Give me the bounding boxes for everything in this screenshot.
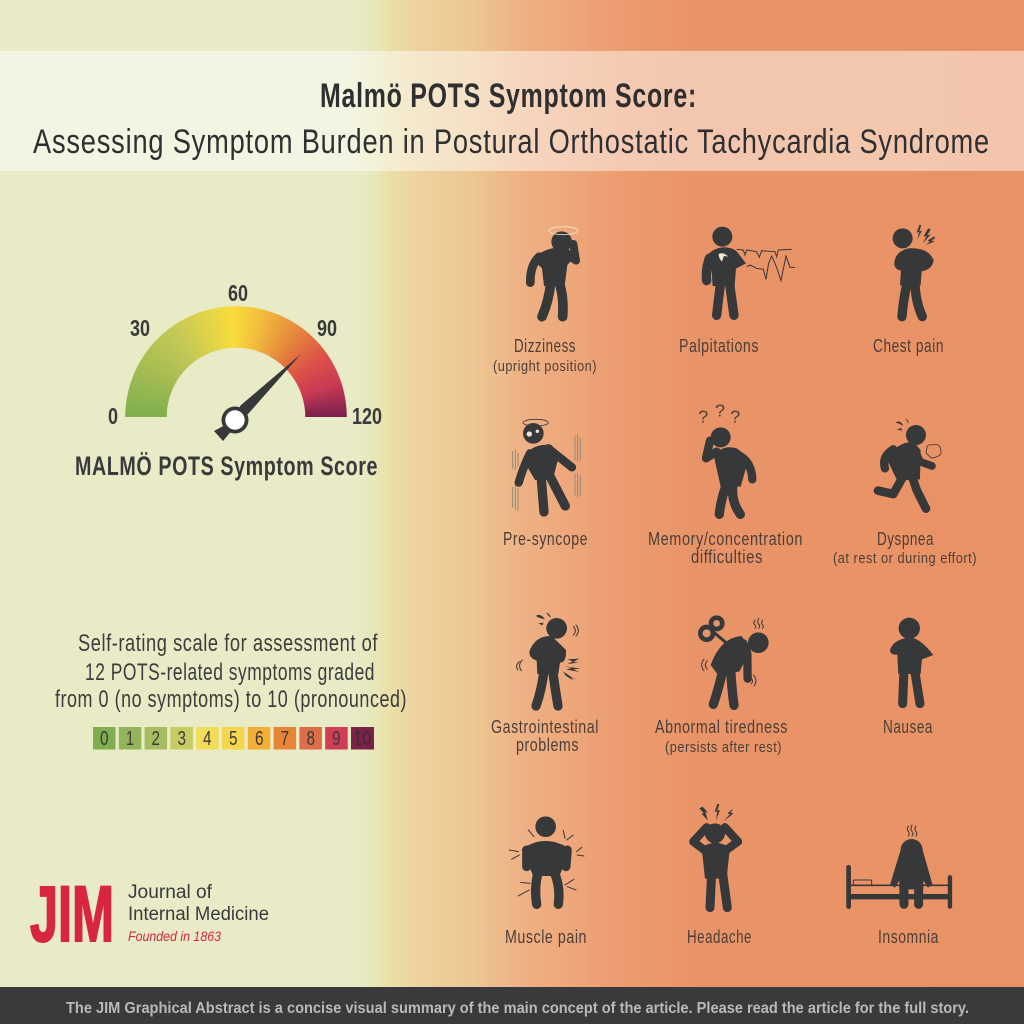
rating scale 0 to 10: 0	[100, 728, 108, 750]
label: dizziness: Dizziness	[514, 336, 576, 356]
gauge title: MALMÖ POTS Symptom Score	[75, 451, 378, 481]
gauge scale numbers: 90	[317, 315, 337, 341]
scale description: from 0 (no symptoms) to 10 (pronounced)	[55, 686, 407, 713]
label: dyspnea: (at rest or during effort)	[833, 550, 977, 567]
label: dizziness: (upright position)	[493, 358, 597, 375]
rating scale 0 to 10: 2	[152, 728, 160, 750]
label: gastrointestinal problems: problems	[516, 735, 579, 755]
rating scale 0 to 10: 8	[306, 728, 315, 750]
gauge scale numbers	[108, 280, 382, 429]
gauge scale numbers: 60	[228, 280, 248, 306]
icon: dyspnea	[878, 418, 941, 509]
icon: palpitations	[704, 227, 795, 315]
label: abnormal tiredness: Abnormal tiredness	[655, 717, 788, 737]
gauge scale numbers: 30	[130, 315, 150, 341]
label: gastrointestinal problems: Gastrointestinal	[491, 717, 599, 737]
label: memory difficulties: Memory/concentration	[648, 529, 803, 549]
gauge scale numbers: 0	[108, 403, 118, 429]
icon: insomnia	[849, 825, 950, 907]
label: chest pain: Chest pain	[873, 336, 944, 356]
icon: pre-syncope	[513, 419, 580, 512]
title banner	[0, 51, 1024, 171]
rating scale 0 to 10: 4	[203, 728, 212, 750]
JIM logo	[30, 869, 269, 958]
rating scale 0 to 10: 9	[332, 728, 340, 750]
rating scale 0 to 10: 1	[126, 728, 134, 750]
label: abnormal tiredness	[655, 717, 788, 756]
rating scale 0 to 10	[93, 727, 374, 750]
label: pre-syncope: Pre-syncope	[503, 529, 588, 549]
label: muscle pain: Muscle pain	[505, 927, 587, 947]
footer bar	[0, 987, 1024, 1024]
icon: memory difficulties: ?	[698, 407, 708, 427]
icon: muscle pain	[509, 816, 584, 904]
label: dyspnea: Dyspnea	[877, 529, 934, 549]
rating scale 0 to 10: 10	[354, 728, 372, 750]
icon: chest pain	[893, 225, 935, 317]
JIM logo: JIM	[30, 869, 114, 958]
rating scale 0 to 10: 5	[229, 728, 238, 750]
icon: memory difficulties: ?	[730, 407, 740, 427]
gauge needle	[214, 354, 301, 441]
JIM logo: Journal of	[128, 882, 213, 903]
JIM logo: Internal Medicine	[128, 904, 269, 925]
label: dizziness	[493, 336, 597, 375]
gauge colour arc	[125, 306, 347, 417]
label: palpitations: Palpitations	[679, 336, 759, 356]
icon: headache	[693, 804, 738, 908]
rating scale 0 to 10: 3	[178, 728, 186, 750]
label: memory difficulties	[648, 529, 803, 567]
title	[33, 77, 990, 161]
title: Malmö POTS Symptom Score:	[320, 77, 697, 115]
rating scale 0 to 10: 7	[280, 728, 289, 750]
scale description	[55, 630, 407, 713]
label: memory difficulties: difficulties	[691, 547, 763, 567]
icon: memory difficulties: ?	[715, 401, 725, 421]
icon: gastrointestinal problems	[517, 613, 581, 706]
rating scale 0 to 10: 6	[255, 728, 264, 750]
label: insomnia: Insomnia	[878, 927, 939, 947]
label: nausea: Nausea	[883, 717, 933, 737]
gauge scale numbers: 120	[352, 403, 382, 429]
scale description: Self-rating scale for assessment of	[78, 630, 378, 657]
icon: dizziness	[530, 227, 578, 317]
label: gastrointestinal problems	[491, 717, 599, 755]
icon: nausea	[890, 618, 933, 704]
scale description: 12 POTS-related symptoms graded	[85, 659, 375, 686]
label: headache: Headache	[687, 927, 752, 947]
label: abnormal tiredness: (persists after rest)	[665, 739, 782, 756]
JIM logo: Founded in 1863	[128, 928, 221, 944]
icon: memory difficulties	[698, 401, 752, 514]
label: dyspnea	[833, 529, 977, 567]
icon: abnormal tiredness	[700, 618, 769, 705]
